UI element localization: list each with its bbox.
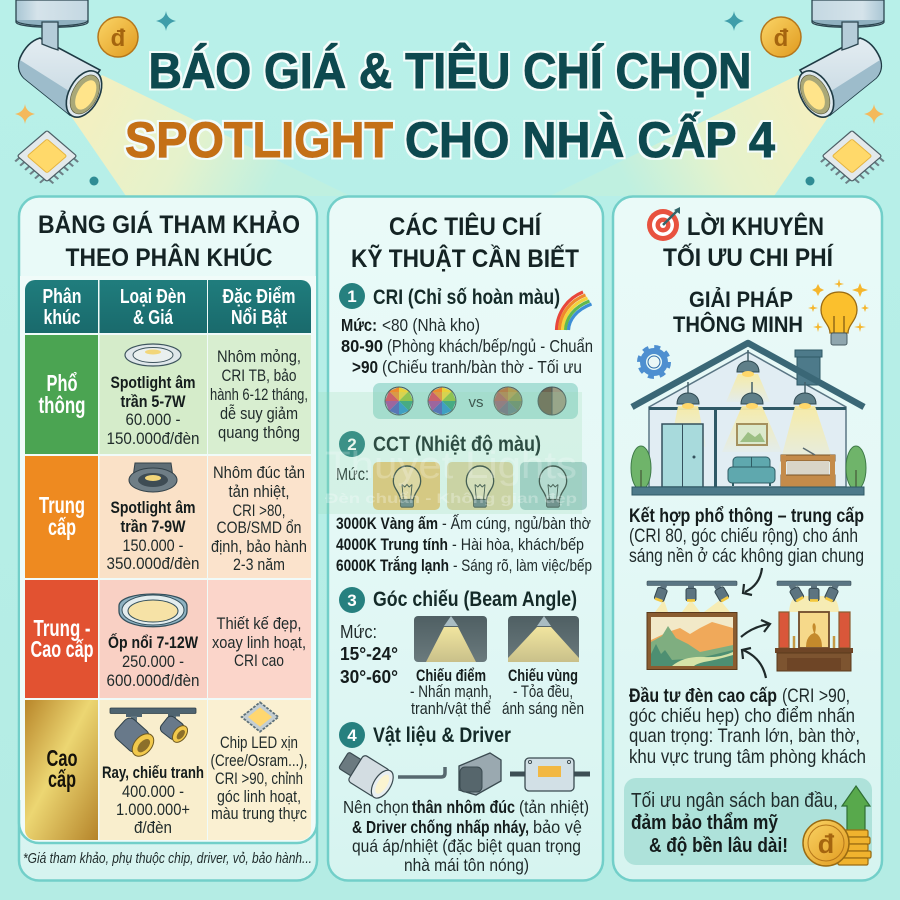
table header: & Giá xyxy=(133,307,174,329)
row: Trung cấp: CRI >80, xyxy=(232,501,286,520)
number badge 3: 3 xyxy=(347,591,357,610)
spotlight fixture right xyxy=(791,0,884,123)
desk xyxy=(781,448,835,487)
row: Trung - Cao cấp xyxy=(25,580,311,698)
row: Cao cấp: Cao xyxy=(46,745,78,771)
illustration: house xyxy=(631,343,866,495)
dot right xyxy=(806,176,814,186)
icon: coin right: đ xyxy=(774,25,789,52)
callout: budget xyxy=(624,778,872,866)
section 3: beam angle: - Nhấn mạnh, xyxy=(410,682,492,701)
row: Trung cấp: tản nhiệt, xyxy=(228,482,290,501)
section 1: CRI: Mức: xyxy=(341,315,377,335)
icon: die-cast downlight xyxy=(129,463,177,492)
callout: budget: & độ bền lâu dài! xyxy=(649,835,788,857)
section 1: CRI: <80 (Nhà kho) xyxy=(382,315,480,335)
icon: target xyxy=(647,207,680,241)
row: Phổ thông: thông xyxy=(38,392,86,418)
row: Trung cấp: 350.000đ/đèn xyxy=(106,554,200,573)
picture xyxy=(737,424,767,445)
number badge 2 xyxy=(339,431,365,457)
row: Trung cấp: cấp xyxy=(48,514,76,540)
section 4: material and driver xyxy=(335,722,590,875)
row: Trung cấp: 150.000 - xyxy=(122,536,184,555)
row: Phổ thông: hành 6-12 tháng, xyxy=(210,385,308,404)
table header: khúc xyxy=(44,307,80,329)
row: Cao cấp: Ray, chiếu tranh xyxy=(102,764,204,782)
panel background left xyxy=(19,196,317,880)
light beam left xyxy=(71,75,350,196)
floor xyxy=(632,487,864,495)
section 4: material and driver: Vật liệu & Driver xyxy=(373,723,512,747)
arrow: painting to altar xyxy=(741,620,770,637)
table header: Phân xyxy=(42,286,82,308)
icon: LED chip right xyxy=(818,130,886,189)
row: Trung cấp: Spotlight âm xyxy=(110,499,196,517)
row: Phổ thông: Phổ xyxy=(46,370,78,396)
arrow: text to painting xyxy=(742,648,766,678)
icon: idea bulb xyxy=(808,279,869,345)
section 3: beam angle xyxy=(339,587,584,718)
row: Cao cấp xyxy=(25,700,311,840)
left spotlight decoration xyxy=(16,0,350,196)
row: Phổ thông: Nhôm mỏng, xyxy=(217,347,301,366)
heading: technical criteria xyxy=(351,211,579,273)
table header: Đặc Điểm xyxy=(222,286,296,308)
watermark: Thuyet Lights xyxy=(325,445,577,487)
row: Cao cấp: 1.000.000+ xyxy=(116,800,190,819)
light beams xyxy=(670,374,836,470)
heading: technical criteria: CÁC TIÊU CHÍ xyxy=(389,211,542,241)
number badge 1 xyxy=(339,283,365,309)
icon: track lights xyxy=(110,708,196,760)
light beam right xyxy=(550,75,829,196)
sofa xyxy=(728,457,775,486)
section 1: CRI: 80-90 xyxy=(341,336,383,356)
icon: driver box xyxy=(510,758,590,791)
section 3: beam angle: Mức: xyxy=(340,622,377,642)
section 4: material and driver: quá áp/nhiệt (đặc biệt quan trọng xyxy=(352,836,581,856)
house walls xyxy=(649,352,846,487)
title: SPOTLIGHT xyxy=(125,112,393,168)
text: invest in premium lights: góc chiếu hẹp) cho điểm nhấn xyxy=(629,705,855,727)
arrow: to track xyxy=(743,568,762,595)
row: Phổ thông xyxy=(25,335,311,454)
text: invest in premium lights: khu vực trung tâm phòng khách xyxy=(629,746,866,768)
row: Cao cấp: đ/đèn xyxy=(134,818,172,837)
icon: dong coin: đ xyxy=(818,829,835,859)
row: Trung cấp: định, bảo hành xyxy=(211,537,307,556)
row: Cao cấp: CRI >90, chỉnh xyxy=(215,769,303,788)
row: Cao cấp: cấp xyxy=(48,766,76,792)
section 3: beam angle: ánh sáng nền xyxy=(502,699,584,718)
section 3: beam angle: - Tỏa đều, xyxy=(513,682,573,701)
heading: price table xyxy=(38,209,300,272)
section 2: CCT: - Hài hòa, khách/bếp xyxy=(452,535,584,554)
icon: coin left: đ xyxy=(111,25,126,52)
row: Cao cấp: Chip LED xịn xyxy=(220,733,298,752)
panel background middle xyxy=(328,196,603,880)
icon: lamp housing xyxy=(335,747,398,802)
watermark xyxy=(318,392,582,514)
row: Phổ thông: dễ suy giảm xyxy=(220,404,298,423)
number badge 2: 2 xyxy=(347,435,357,454)
number badge 1: 1 xyxy=(347,287,357,306)
row: Phổ thông: trần 5-7W xyxy=(120,393,186,411)
text: invest in premium lights xyxy=(629,685,866,768)
pendant lamps xyxy=(677,350,816,409)
icon: orange sparkle right xyxy=(864,104,884,124)
table card bottom edge xyxy=(19,800,317,843)
section 2: CCT xyxy=(336,431,592,575)
icon: gear xyxy=(639,347,669,377)
text: invest in premium lights: (CRI >90, xyxy=(782,685,850,707)
text: invest in premium lights: quan trọng: Tranh lớn, bàn thờ, xyxy=(629,725,860,747)
watermark: Đèn chuẩn - Không gian đẹp xyxy=(325,490,577,506)
subheading: smart solution xyxy=(673,287,803,337)
section 4: material and driver: bảo vệ xyxy=(533,817,582,837)
row: Phổ thông: 60.000 - xyxy=(126,410,180,429)
section 2: CCT: - Ấm cúng, ngủ/bàn thờ xyxy=(442,514,591,533)
table header xyxy=(25,280,311,333)
icon: orange sparkle left xyxy=(15,104,35,124)
section 1: CRI xyxy=(339,283,593,419)
title: CHO NHÀ CẤP 4 xyxy=(405,112,775,168)
icon: LED chip small xyxy=(242,702,278,732)
table card backing xyxy=(20,276,316,843)
row: Trung cấp: 2-3 năm xyxy=(233,555,285,574)
table header: Loại Đèn xyxy=(120,286,186,308)
row: Trung - Cao cấp: 250.000 - xyxy=(122,652,184,671)
text: invest in premium lights: Đầu tư đèn cao cấp xyxy=(629,685,777,707)
section 4: material and driver: thân nhôm đúc xyxy=(412,797,515,817)
bulb tile warm xyxy=(373,462,440,510)
section 4: material and driver: (tản nhiệt) xyxy=(519,797,589,817)
panel: cost advice xyxy=(613,196,882,880)
icon: growth arrow xyxy=(842,786,870,832)
bulb tile neutral xyxy=(447,462,513,510)
trees xyxy=(631,446,866,490)
section 4: material and driver: Nên chọn xyxy=(343,797,409,817)
heading: cost advice xyxy=(663,211,834,272)
subheading: smart solution: GIẢI PHÁP xyxy=(689,287,793,312)
row: Cao cấp: góc linh hoạt, xyxy=(217,787,301,806)
row: Trung cấp: trần 7-9W xyxy=(120,518,186,536)
callout: budget: đảm bảo thẩm mỹ xyxy=(631,812,779,834)
spotlight fixture left xyxy=(16,0,109,123)
color wheels comparison: vs xyxy=(468,394,484,411)
row: Trung - Cao cấp: Cao cấp xyxy=(30,636,94,662)
row: Trung - Cao cấp: Ốp nổi 7-12W xyxy=(108,632,198,652)
section 1: CRI: (Chiếu tranh/bàn thờ - Tối ưu xyxy=(382,357,582,377)
row: Phổ thông: CRI TB, bảo xyxy=(222,366,296,385)
icon: coin left xyxy=(98,17,138,57)
number badge 4 xyxy=(339,722,365,748)
row: Cao cấp: (Cree/Osram...), xyxy=(210,751,308,770)
panel: price table xyxy=(19,196,317,880)
section 2: CCT: 4000K Trung tính xyxy=(336,536,448,554)
heading: technical criteria: KỸ THUẬT CẦN BIẾT xyxy=(351,243,579,273)
icon: coin stack xyxy=(838,830,871,865)
chimney xyxy=(795,350,822,385)
row: Trung - Cao cấp: Thiết kế đẹp, xyxy=(216,614,302,633)
section 1: CRI: >90 xyxy=(352,357,378,377)
bulb tile cool xyxy=(520,462,587,510)
row: Trung cấp: Nhôm đúc tản xyxy=(213,463,305,482)
title xyxy=(125,43,775,168)
row: Trung - Cao cấp: Trung - xyxy=(34,615,90,641)
color wheels comparison xyxy=(373,383,578,419)
section 4: material and driver: nhà mái tôn nóng) xyxy=(404,855,529,875)
icon: teal sparkle right xyxy=(724,11,744,31)
row: Cao cấp: màu trung thực xyxy=(211,804,307,823)
tile: flood beam xyxy=(508,616,579,662)
subheading: smart solution: THÔNG MINH xyxy=(673,312,803,337)
panel background right xyxy=(613,196,882,880)
section 1: CRI: CRI (Chỉ số hoàn màu) xyxy=(373,285,560,309)
row: Trung cấp xyxy=(25,456,311,578)
icon: allen key xyxy=(398,767,445,777)
section 2: CCT: 3000K Vàng ấm xyxy=(336,515,438,533)
icon: die-cast body xyxy=(459,753,501,795)
icon: surface mounted light xyxy=(119,594,187,627)
row: Trung - Cao cấp: CRI cao xyxy=(234,651,284,670)
icon: LED chip left xyxy=(13,130,81,189)
row: Trung cấp: Trung xyxy=(39,492,85,518)
heading: price table: BẢNG GIÁ THAM KHẢO xyxy=(38,209,300,239)
icon: coin right xyxy=(761,17,801,57)
row: Phổ thông: 150.000đ/đèn xyxy=(106,429,200,448)
door xyxy=(662,424,703,487)
text: combine mainstream and mid range xyxy=(629,505,864,567)
heading: price table: THEO PHÂN KHÚC xyxy=(66,242,272,272)
section 3: beam angle: tranh/vật thể xyxy=(411,699,491,718)
table header: Nổi Bật xyxy=(231,307,287,329)
heading: cost advice: TỐI ƯU CHI PHÍ xyxy=(663,242,834,272)
number badge 4: 4 xyxy=(347,726,357,745)
section 3: beam angle: Chiếu điểm xyxy=(416,667,486,685)
section 3: beam angle: Chiếu vùng xyxy=(508,667,578,685)
panel: technical criteria xyxy=(318,196,603,880)
right spotlight decoration xyxy=(550,0,884,196)
section 3: beam angle: 15°-24° xyxy=(340,644,398,664)
section 3: beam angle: Góc chiếu (Beam Angle) xyxy=(373,587,577,611)
dot left xyxy=(90,176,98,186)
row: Trung - Cao cấp: 600.000đ/đèn xyxy=(106,671,200,690)
section 2: CCT: 6000K Trắng lạnh xyxy=(336,556,449,575)
row: Trung cấp: COB/SMD ổn xyxy=(216,518,302,537)
icon: thin downlight xyxy=(125,344,181,366)
icon: rainbow xyxy=(556,292,592,330)
illustration: altar with track xyxy=(775,581,853,671)
section 1: CRI: (Phòng khách/bếp/ngủ - Chuẩn xyxy=(387,336,593,356)
section 4: material and driver: & Driver chống nhấp nháy, xyxy=(352,817,529,837)
section 3: beam angle: 30°-60° xyxy=(340,667,398,687)
row: Cao cấp: 400.000 - xyxy=(122,782,184,801)
number badge 3 xyxy=(339,587,365,613)
title: BÁO GIÁ & TIÊU CHÍ CHỌN xyxy=(148,43,752,99)
heading: cost advice: LỜI KHUYÊN xyxy=(687,211,824,241)
tile: spot beam xyxy=(414,616,487,662)
illustration: painting with track xyxy=(647,581,737,670)
section 2: CCT: Mức: xyxy=(336,464,369,484)
section 2: CCT: - Sáng rõ, làm việc/bếp xyxy=(453,556,592,575)
row: Phổ thông: Spotlight âm xyxy=(110,374,196,392)
footnote: *Giá tham khảo, phụ thuộc chip, driver, vỏ, bảo hành... xyxy=(23,850,312,867)
icon: teal sparkle left xyxy=(156,11,176,31)
callout: budget: Tối ưu ngân sách ban đầu, xyxy=(631,790,838,812)
roof xyxy=(632,343,864,407)
row: Phổ thông: quang thông xyxy=(218,423,300,442)
row: Trung - Cao cấp: xoay linh hoạt, xyxy=(212,633,306,652)
icon: dong coin xyxy=(803,820,849,866)
section 2: CCT: CCT (Nhiệt độ màu) xyxy=(373,432,541,456)
